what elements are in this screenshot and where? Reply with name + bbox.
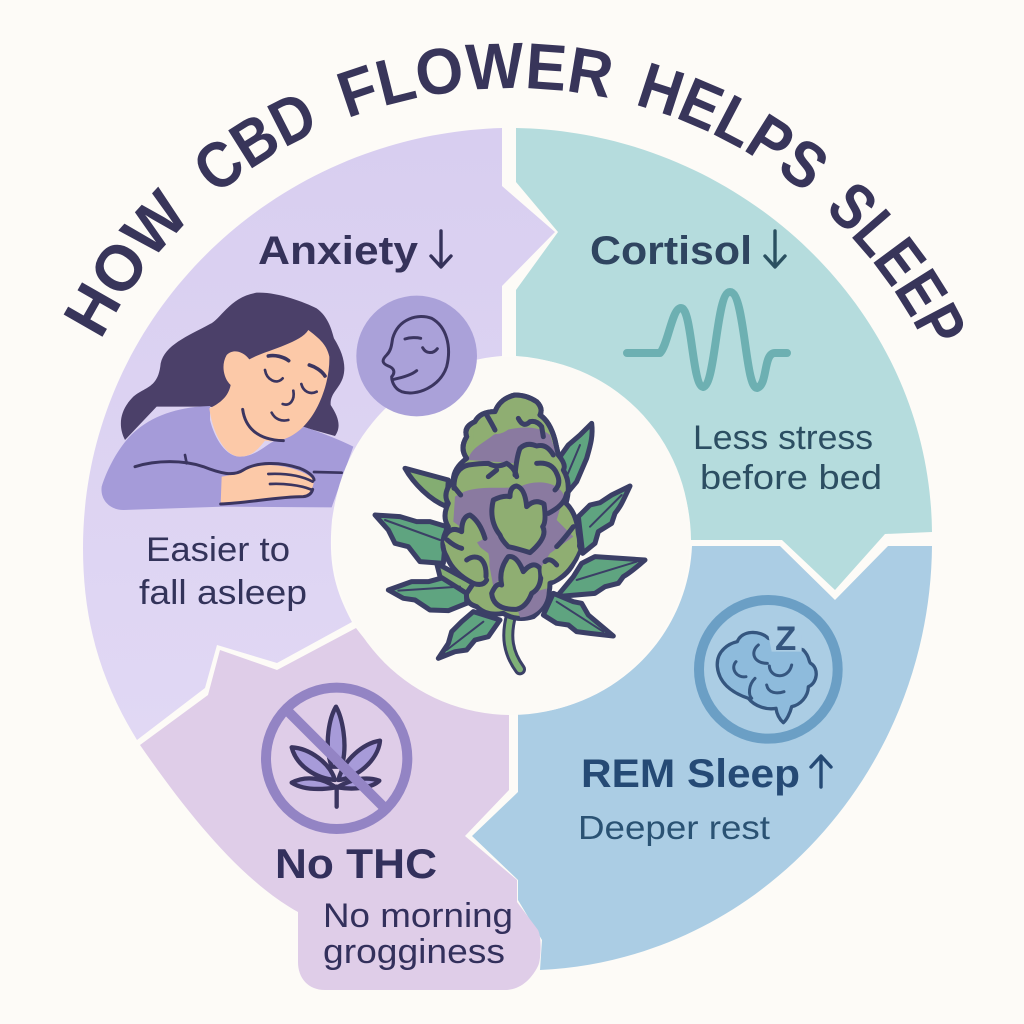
panel: REM sleep: [472, 546, 932, 970]
icon: calm face: [356, 296, 477, 416]
panel: cortisol: [516, 128, 932, 590]
icon: no cannabis leaf: [266, 688, 407, 829]
central circle: [332, 357, 690, 715]
panel: anxiety: [83, 128, 555, 740]
heading: no THC: No THC: [275, 840, 437, 887]
icon: brain with Z: Z: [775, 620, 796, 658]
bud lobes: [443, 397, 578, 609]
leaves: [375, 423, 645, 658]
leaf veins: [385, 445, 637, 650]
purple blotches: [453, 427, 573, 617]
arrow: cortisol down: [765, 231, 785, 267]
segment shape: no THC: [140, 628, 541, 990]
text: easier to fall asleep: fall asleep: [139, 574, 307, 612]
text: deeper rest: Deeper rest: [578, 809, 770, 846]
bud body: [443, 395, 580, 619]
panel: no THC: [140, 628, 541, 990]
bud outlines: [444, 395, 573, 584]
heading: cortisol down: Cortisol: [590, 229, 752, 273]
illustration: cannabis flower: [375, 395, 645, 669]
title: HELPS: [638, 62, 826, 188]
text: less stress before bed: before bed: [700, 459, 882, 497]
segment shape: anxiety: [83, 128, 555, 740]
text: easier to fall asleep: Easier to: [146, 531, 290, 569]
text: less stress before bed: Less stress: [693, 419, 873, 457]
title: SLEEP: [830, 184, 963, 338]
arrow: anxiety down: [431, 231, 451, 267]
text: no morning grogginess: grogginess: [323, 933, 505, 971]
text: no morning grogginess: No morning: [323, 897, 513, 935]
illustration: sleeping woman: [101, 293, 353, 510]
heading: anxiety down: Anxiety: [258, 229, 419, 273]
title: HOW: [64, 186, 184, 337]
title: [64, 42, 963, 338]
title: CBD: [198, 97, 312, 187]
arrow: REM sleep up: [811, 756, 831, 787]
icon: cortisol waveform: [627, 292, 787, 388]
title: FLOWER: [336, 42, 611, 117]
segment shape: cortisol: [516, 128, 932, 590]
text: no morning grogginess: [323, 897, 513, 971]
icon: brain with Z: [699, 600, 838, 739]
stem: [508, 613, 520, 669]
text: easier to fall asleep: [139, 531, 307, 612]
heading: REM sleep up: REM Sleep: [581, 752, 800, 796]
segment shape: REM sleep: [472, 546, 932, 970]
text: less stress before bed: [693, 419, 882, 497]
